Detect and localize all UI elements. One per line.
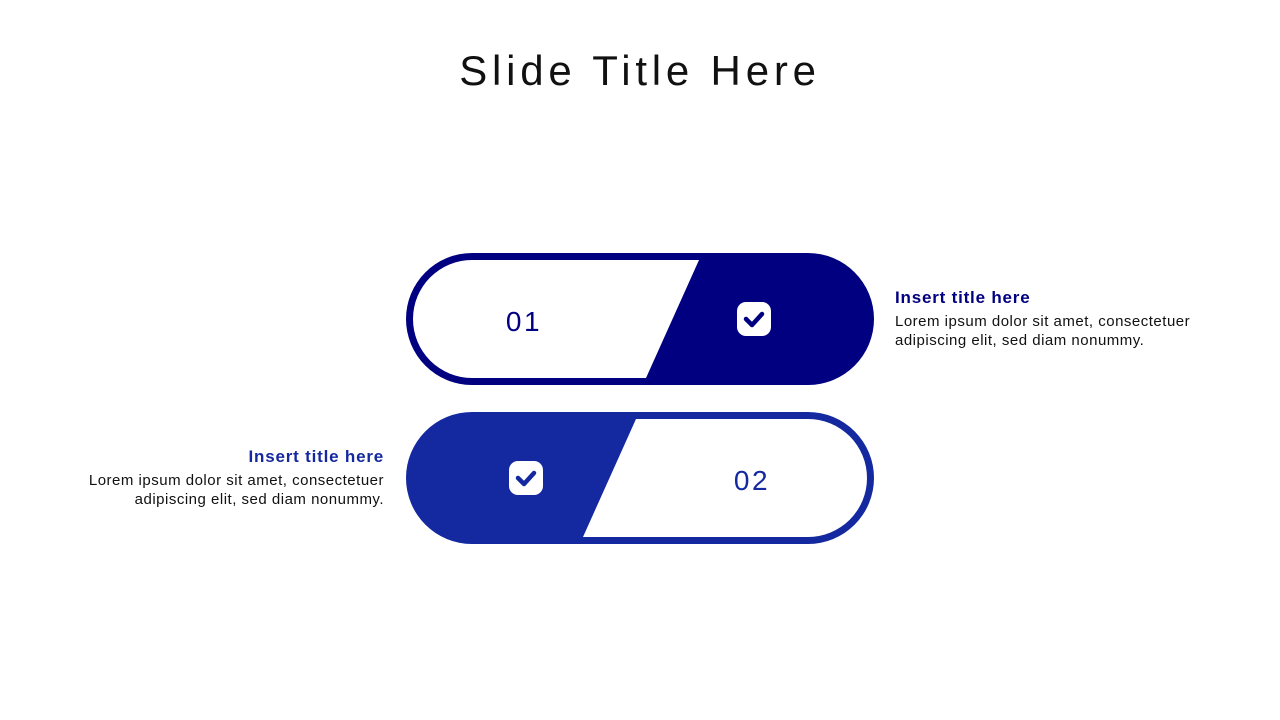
text block 1: Lorem ipsum dolor sit amet, consectetuer adipiscing elit, sed diam nonummy. <box>895 313 1190 349</box>
pill 2: 02 <box>734 465 770 496</box>
title: Slide Title Here <box>459 47 821 94</box>
pill 1 <box>406 253 874 385</box>
text block 2 <box>89 447 384 508</box>
pill 2 <box>406 412 874 544</box>
pill 1: 01 <box>506 306 542 337</box>
text block 1: Insert title here <box>895 288 1030 307</box>
text block 1 <box>895 288 1190 349</box>
text block 2: Insert title here <box>249 447 384 466</box>
text block 2: Lorem ipsum dolor sit amet, consectetuer adipiscing elit, sed diam nonummy. <box>89 472 384 508</box>
